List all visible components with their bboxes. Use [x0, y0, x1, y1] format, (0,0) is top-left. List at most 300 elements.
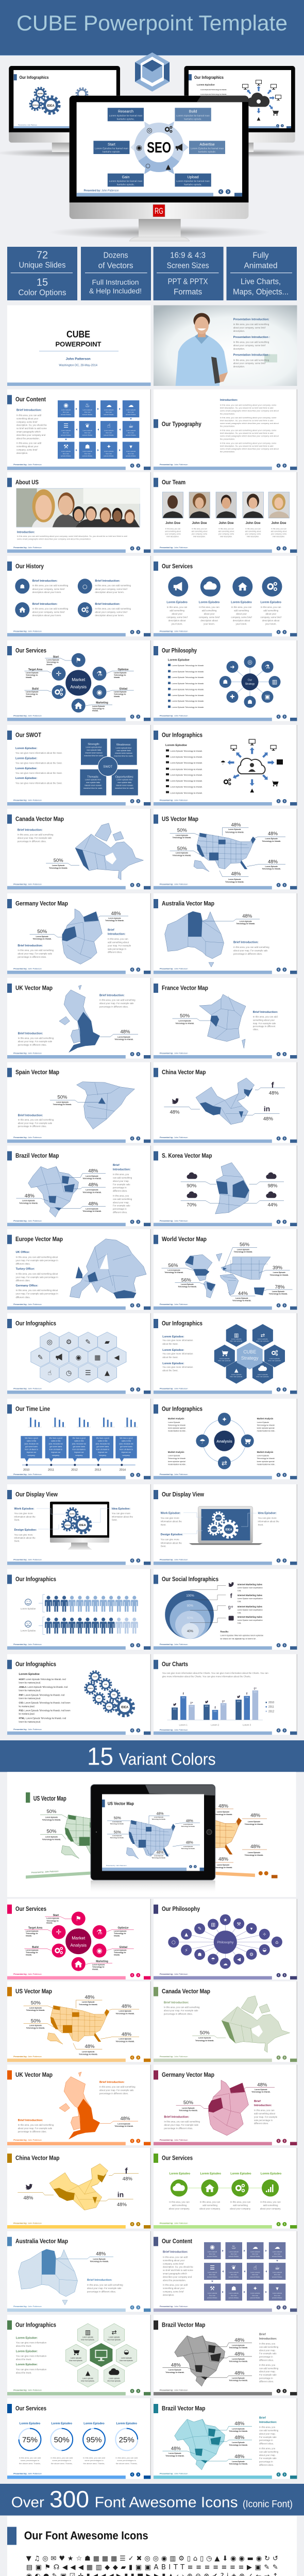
- SEO step boxes: Lorem Episdoe ke kamal man: [109, 180, 143, 183]
- behind slide: orange variant: 48%: [250, 1812, 261, 1818]
- slide: canada map: [7, 809, 150, 889]
- display labels: information about the: [14, 1537, 36, 1539]
- hexagon cluster: khor man episode.: [230, 1376, 243, 1378]
- heading: Canada Vector Map: [15, 816, 64, 822]
- callout and text: Tehcnology ke kharab.: [90, 2261, 109, 2263]
- bar chart: g+: [190, 1702, 193, 1705]
- history circles: ○: [82, 583, 88, 590]
- office text: [15, 1251, 58, 1298]
- timeline axis and years: 2014: [120, 1469, 126, 1472]
- social leaders and text: Lorem Epsdoe more sepcification: [238, 1598, 263, 1600]
- icon tile grid: Lorem episode: [229, 2292, 239, 2294]
- analysis wheel diagram: ⇄: [222, 1460, 227, 1467]
- icon glyph grid: ▤▣⚑☊◀◀◀▦▥◆◆▰▮▣▣ABITT≡≡≡≡≡≡≡▶▣✎✎: [26, 2564, 278, 2571]
- slide: purple philosophy: [154, 1899, 297, 1979]
- icon tile grid: Lorem episode: [208, 2251, 217, 2253]
- hub labels: Tehcnology ke: [26, 693, 38, 696]
- nested ellipse funnel: 80%: [187, 1604, 194, 1607]
- introduction text: [17, 531, 127, 540]
- ring values and text: 50%: [54, 2436, 70, 2444]
- market analysis text: Market Analysis: [168, 1417, 184, 1420]
- callout and text: about your map. For example sale: [233, 949, 268, 952]
- callout and text: In this area, you can add something: [18, 1118, 54, 1121]
- history text: description about your lorem.: [95, 591, 124, 594]
- banner: over 300 font awesome icons: Font Awesome Icons: [95, 2494, 238, 2511]
- hub labels: Lorem Episode: [114, 1950, 127, 1952]
- callouts and text: In this area, you can: [254, 2109, 275, 2111]
- history text: Brief Introduction:: [95, 603, 120, 606]
- callouts: Tehcnology ke kharab.: [116, 2013, 134, 2015]
- list: Lorem Episode Tehcnology ke kharab.: [172, 676, 204, 679]
- history text: Brief Introduction:: [32, 580, 58, 583]
- icon tile grid: [204, 2242, 285, 2301]
- hexagon cluster: ▥: [234, 1333, 239, 1338]
- icon tile grid: khor man: [106, 453, 112, 455]
- hexagon grid: ▲: [105, 1369, 110, 1377]
- SEO step boxes: Lorem Episdoe ke kamal man: [95, 147, 128, 150]
- hub labels: Lorem Episode: [26, 1930, 39, 1933]
- swot matrix: SWOT: [103, 766, 113, 769]
- swot matrix: Threads:: [87, 775, 99, 778]
- heading: Our Infographics: [15, 1577, 56, 1583]
- text block: You can give more information: [162, 1352, 193, 1355]
- stat: screen sizes and formats: [167, 251, 209, 296]
- service text: Lorem Episdeo: [199, 601, 220, 604]
- callouts and text: In this area, you: [113, 1194, 129, 1197]
- intro text: description.: [233, 347, 245, 350]
- technology text: CSS: Lorem Episode Tehcnology ke kharab. And lorem: [19, 1702, 71, 1704]
- callouts and text: add something about: [108, 941, 129, 943]
- icon tile grid: Lorem episode: [61, 409, 71, 411]
- panel: feature boxes: [7, 247, 297, 300]
- callouts and text: In this area, you can: [108, 938, 128, 940]
- timeline cards: got some loans: [96, 1446, 109, 1448]
- icon tile grid: ❦: [85, 422, 90, 429]
- history text: about your company, some brief: [95, 611, 128, 613]
- icon tile grid: episode lkhalas.: [126, 455, 136, 457]
- stat: screen sizes and formats: Screen Sizes: [167, 261, 209, 270]
- strategy wheel: Strategy: [245, 683, 255, 686]
- stat: 72 unique slides, 15 colours: Unique Slides: [19, 261, 66, 269]
- ring values and text: 25%: [119, 2436, 134, 2444]
- behind slide: orange variant: Tehcnology ke kharab.: [214, 1867, 232, 1869]
- callout and text: Lorem Episode: [178, 1020, 191, 1022]
- swot text: Lorem Episdoe:: [15, 757, 37, 760]
- icon: cube logo: [135, 53, 170, 92]
- text block: something about your: [16, 417, 39, 420]
- ring values and text: Lorem Episdeo: [51, 2422, 72, 2425]
- philosophy wheel: ◀: [237, 1957, 241, 1962]
- technology text: lorem ke mariana jioud.: [19, 1681, 41, 1684]
- bar chart: 70%: [245, 1697, 248, 1699]
- intro and callout: Tehcnology ke kharab.: [195, 2040, 214, 2042]
- footer: Presented by: John Patterson: [160, 1052, 188, 1054]
- slide: south korea map: [154, 1146, 297, 1226]
- display labels: Swot.: [14, 1540, 20, 1543]
- paragraphs: In this area, you can add something about your company, some: [220, 429, 276, 432]
- text block: something about your: [16, 445, 39, 448]
- monitor: right cloud slide: Lorem Episode Tehcnology ke kharab.: [200, 89, 227, 91]
- ring values and text: In this area, you can add: [50, 2456, 73, 2459]
- text block: company, some brief: [163, 2262, 184, 2265]
- list: Lorem Episdoe: [165, 744, 188, 747]
- icon tile grid: [58, 400, 139, 459]
- callout and text: about your map. For example sale: [18, 2127, 53, 2130]
- callouts and text: different cities.: [259, 2380, 274, 2383]
- icon tile grid: khor man: [63, 453, 69, 455]
- strategy wheel: Our: [248, 679, 252, 682]
- map: korea: [215, 1162, 249, 1214]
- heading: Our Services: [162, 2156, 193, 2162]
- nested ellipse funnel: [165, 1590, 214, 1639]
- footer: Presented by: John Patterson: [13, 1387, 42, 1390]
- callouts: 70%: [187, 1202, 197, 1208]
- callout and text: about your map. For example sale: [87, 2287, 122, 2290]
- service text: description about: [168, 619, 186, 622]
- callouts and text: percentage in: [113, 1208, 127, 1210]
- technology text: Lorem Episdoe: [19, 1673, 40, 1676]
- footer: Presented by: John Patterson: [160, 2388, 188, 2391]
- service text: description about: [233, 619, 250, 622]
- history text: [32, 580, 131, 617]
- ring values and text: In this area, you can add: [115, 2456, 138, 2459]
- SEO step boxes: Lorem Episdoe ke kamal man: [109, 114, 143, 117]
- heading: Our Team: [162, 480, 185, 486]
- icon tile grid: ❦: [231, 2264, 236, 2271]
- slide: green hexagons: [7, 2315, 150, 2395]
- text block: Lorem Episdoe:: [16, 2336, 38, 2340]
- text block: In this area, you can add: [16, 442, 42, 445]
- hub labels: Lorem Episode: [26, 672, 39, 674]
- slide: orange uk map: [7, 2065, 150, 2145]
- hexagon cluster: ▲: [234, 1368, 239, 1374]
- service text: add something: [234, 609, 249, 612]
- team names and bios: add something about: [218, 530, 234, 532]
- stat: 72 unique slides, 15 colours: [19, 249, 66, 297]
- footer: Presented by: John Patterson: [13, 968, 42, 970]
- map: usa: [194, 833, 256, 872]
- hexagon cluster: ▥: [85, 2329, 91, 2336]
- footer: Presented by: John Patterson: [13, 1643, 42, 1646]
- technology text: ke mariana jioud.: [19, 1713, 35, 1715]
- tablet device: Lorem Episode: [154, 1855, 164, 1857]
- icon tile grid: Lorem episode: [126, 450, 136, 452]
- service text: add something: [170, 609, 185, 612]
- slide: cover: [7, 305, 150, 386]
- callouts and text: Brief: [259, 2333, 266, 2336]
- icon tile grid: ☁: [106, 402, 112, 409]
- callouts: Tehcnology ke kharab.: [173, 855, 191, 857]
- timeline cards: company.: [28, 1454, 35, 1456]
- footer: Presented by: John Patterson: [13, 1973, 42, 1975]
- callouts: Lorem Episode: [29, 2024, 42, 2026]
- service text: Lorem Episdeo: [170, 2172, 191, 2175]
- callouts: 56%: [168, 1263, 178, 1268]
- callouts: [24, 1995, 139, 2056]
- callout and text: cities.: [253, 1028, 259, 1030]
- callouts: 50%: [177, 827, 187, 833]
- team names and bios: brief description.: [166, 535, 179, 537]
- slide: gold china map: [7, 2148, 150, 2229]
- gear chain: CSS: [97, 1698, 100, 1700]
- callouts and text: percentage in: [259, 2439, 273, 2442]
- icon tile grid: Lorem episode: [61, 450, 71, 452]
- technology text: PSD: Lorem Episode Tehcnology ke kharab. And lorem: [19, 1709, 71, 1711]
- monitor with gears: [50, 1502, 109, 1550]
- text block: description. So, you should be: [163, 2266, 193, 2268]
- callouts and text: In this area, you: [259, 2342, 276, 2345]
- callouts and text: percentage in different cities.: [18, 956, 46, 958]
- list: Lorem Episode Tehcnology ke kharab.: [170, 769, 202, 771]
- heading: Our Font Awesome Icons: [24, 2529, 148, 2542]
- callout and text: [18, 2081, 138, 2133]
- callouts and text: Tehcnology ke kharab.: [82, 1210, 102, 1212]
- callout and text: about your map. For example sale: [99, 1002, 134, 1005]
- monitor with gears: IDEA: [79, 1524, 86, 1527]
- tablet device: Lorem Episode: [183, 1824, 193, 1825]
- list: Lorem Episode Tehcnology ke kharab.: [170, 774, 202, 776]
- hub diagram: Market: [72, 1936, 86, 1941]
- office text: In this area, you can add something about: [15, 1289, 58, 1292]
- map: france: [199, 994, 246, 1048]
- behind slide: orange variant: Lorem Episode: [248, 1821, 260, 1823]
- callouts and text: Lorem Episode: [232, 2442, 245, 2444]
- icon tile grid: khor man: [63, 411, 69, 413]
- list: [168, 658, 204, 708]
- callouts and text: about your map. For example sale: [18, 953, 53, 955]
- hub labels: kharab.: [114, 696, 120, 698]
- callouts and text: Tehcnology ke kharab.: [229, 2361, 248, 2363]
- icon tile grid: ⚒: [63, 444, 69, 450]
- heading: Our SWOT: [15, 733, 41, 739]
- top banner: [0, 0, 304, 56]
- SEO step boxes: kartiaho episde.: [103, 150, 121, 154]
- paragraphs: brief description. So, you should be so brief and think to add: [220, 419, 273, 422]
- icon tile grid: episode lkhalas.: [61, 455, 71, 457]
- icon tile grid: khor man: [128, 453, 134, 455]
- heading: US Vector Map: [15, 1989, 52, 1995]
- timeline cards: from US Bank to: [96, 1449, 109, 1451]
- hexagon cluster: Lorem episode: [258, 1338, 268, 1340]
- history text: description about your lorem.: [95, 614, 124, 617]
- text block: Lorem Episdoe:: [16, 2363, 38, 2366]
- callouts and text: Lorem Episode: [182, 2107, 195, 2109]
- intro text: Presentation Introduction:: [233, 318, 269, 321]
- callout and text: 50%: [180, 1013, 190, 1019]
- callouts and text: Introduction:: [259, 2421, 277, 2424]
- philosophy wheel: ⚡: [184, 1948, 188, 1954]
- list: Lorem Episode Tehcnology ke kharab.: [170, 756, 202, 758]
- callouts: Tehcnology ke kharab.: [178, 1286, 197, 1288]
- swot text: Lorem Episdoe:: [15, 747, 37, 750]
- hexagon grid: ✎: [85, 1338, 91, 1346]
- footer: Presented by: John Patterson: [160, 1219, 188, 1222]
- heading: Our Services: [15, 1906, 46, 1912]
- callouts and text: Tehcnology ke kharab.: [82, 1178, 102, 1180]
- service text: Lorem Episdeo: [261, 2172, 282, 2175]
- icon tile grid: Lorem episode: [126, 409, 136, 411]
- SEO step boxes: Lorem Episdoe ke kamal man: [176, 114, 210, 117]
- stat: animated and live charts: Live Charts,: [241, 277, 281, 286]
- service text: [166, 601, 282, 625]
- map: uk: [59, 985, 100, 1053]
- intro text: about your company, some brief: [233, 362, 266, 365]
- icon tile grid: khor man: [63, 432, 69, 434]
- office text: Turkey Office:: [15, 1267, 35, 1270]
- hub labels: kharab.: [26, 1935, 32, 1937]
- cloud hub: ☂: [221, 759, 226, 766]
- display labels: information about the: [112, 1515, 133, 1518]
- icon tile grid: episode lkhalas.: [207, 2276, 217, 2278]
- title: CUBE Powerpoint Template: [16, 11, 288, 35]
- service icons: [168, 577, 282, 597]
- callouts: Lorem Episode: [181, 1283, 194, 1285]
- social callouts: 48%: [263, 1116, 273, 1122]
- paragraphs: some smart paragraphs which describes your company and about: [220, 410, 279, 412]
- timeline cards: company.: [52, 1454, 60, 1456]
- icon tile grid: Lorem episode: [104, 409, 114, 411]
- callout and text: percentage in different cities.: [18, 1043, 47, 1046]
- pictogram rows: [45, 1596, 138, 1634]
- strategy wheel: ☗: [247, 699, 252, 705]
- text block: about the Swot.: [162, 1356, 178, 1359]
- callouts and text: can add something: [259, 2429, 279, 2432]
- introduction text: some smart paragraphs which describes your company and about the presentation.: [17, 537, 91, 540]
- display labels: You can give more: [161, 1538, 179, 1541]
- intro and callout: [18, 828, 79, 869]
- callouts and text: Tehcnology ke kharab.: [82, 1191, 102, 1193]
- timeline cards: sales in this: [51, 1440, 61, 1442]
- swot matrix: [80, 739, 138, 795]
- icon tile grid: Lorem episode: [82, 409, 92, 411]
- team names and bios: In this area, you can: [165, 528, 181, 530]
- list: Lorem Episode Tehcnology ke kharab.: [170, 792, 202, 794]
- swot text: You can give more information about the Swot.: [15, 772, 62, 774]
- behind slide: green variant: 50%: [46, 1809, 57, 1815]
- intro and callout: Brief Introduction:: [164, 2001, 189, 2004]
- heading: World Vector Map: [162, 1236, 207, 1243]
- callouts and text: different cities.: [259, 2464, 274, 2466]
- market analysis text: Tehcnology ke kharab: [257, 1458, 275, 1460]
- callouts and text: Tehcnology ke kharab.: [251, 2091, 271, 2093]
- callouts and text: [162, 2417, 279, 2466]
- callouts and text: Brief: [108, 928, 114, 931]
- intro and callout: 50%: [200, 2030, 210, 2036]
- callouts and text: Introduction:: [113, 1168, 131, 1172]
- philosophy wheel: ⚒: [237, 1922, 241, 1927]
- callouts and text: Tehcnology ke kharab.: [165, 2455, 184, 2457]
- callouts and text: Tehcnology ke kharab.: [179, 2109, 198, 2111]
- bar chart: g+: [254, 1687, 257, 1690]
- swot matrix: Lorem episode khor: [86, 747, 102, 749]
- text block: about the Swot.: [16, 2345, 31, 2347]
- timeline cards: from US Bank to: [25, 1449, 38, 1451]
- cover title: [39, 329, 119, 367]
- callout and text: In this area, you can add something: [18, 2124, 54, 2126]
- callouts and text: Lorem Episode: [86, 1175, 98, 1177]
- social leaders and text: Cola.: [238, 1600, 241, 1602]
- footer: Presented by: John Patterson: [13, 1473, 42, 1476]
- icon tile grid: Lorem episode: [273, 2251, 282, 2253]
- callout and text: Tehcnology ke kharab.: [236, 923, 255, 925]
- bar chart: 75%: [182, 1697, 185, 1699]
- cover title: Washington DC, 28-May-2014: [59, 364, 97, 367]
- footer: Presented by: John Patterson: [160, 2472, 188, 2475]
- strategy wheel: ⚗: [265, 664, 270, 670]
- heading: Australia Vector Map: [162, 901, 214, 907]
- SEO cycle diagram: ◎: [146, 127, 153, 134]
- market analysis text: lorem episdoe special: [257, 1427, 275, 1429]
- market analysis text: lorem episdoe special: [257, 1461, 275, 1463]
- footer: Presented by: John Patterson: [160, 968, 188, 970]
- hexagon cluster: Lorem episode: [109, 2377, 120, 2379]
- hub labels: kharab.: [26, 676, 32, 679]
- market analysis text: Tehcnology ke kharab: [257, 1424, 275, 1426]
- slide: display view laptop: [154, 1484, 297, 1565]
- SEO cycle diagram: ▲: [166, 163, 171, 171]
- callouts and text: For example sale: [259, 2457, 277, 2460]
- hub labels: Lorem Episode: [114, 672, 127, 674]
- timeline cards: improve our: [51, 1451, 61, 1453]
- monitor with gears: DESIGN: [65, 1524, 71, 1526]
- callouts: [181, 1173, 284, 1208]
- map: spain: [77, 1082, 135, 1129]
- bar chart: f: [246, 1693, 248, 1696]
- technology text: [19, 1673, 71, 1723]
- footer: Presented by: John Patterson: [160, 463, 188, 466]
- callouts and text: Lorem Episode: [232, 2461, 245, 2463]
- callouts: Lorem Episode: [272, 1291, 284, 1293]
- team names and bios: John Doe: [165, 521, 180, 525]
- icon: RG badge: [153, 205, 165, 217]
- icon tile grid: episode lkhalas.: [104, 434, 114, 436]
- technology text: lorem ke mariana jioud.: [19, 1689, 41, 1692]
- monitor: centre SEO slide: [49, 96, 271, 241]
- hexagon grid: ◎: [47, 1338, 53, 1346]
- hexagon grid: ☝: [47, 1369, 52, 1377]
- bar chart: 50%: [205, 1705, 208, 1707]
- hexagon cluster: Lorem episode: [258, 1374, 268, 1376]
- icon tile grid: khor man: [85, 411, 91, 413]
- callouts: 48%: [85, 2044, 95, 2049]
- SEO step boxes: kartiaho episde.: [184, 183, 202, 187]
- callouts and text: different cities.: [113, 1190, 127, 1192]
- team names and bios: In this area, you can: [245, 528, 261, 530]
- map: china: [196, 1078, 255, 1125]
- hub diagram: ⚑: [75, 657, 81, 665]
- behind slide: green variant: US Vector Map: [33, 1794, 66, 1802]
- icon tile grid: ♨: [231, 2244, 237, 2250]
- callouts and text: [18, 911, 131, 958]
- service nodes: [171, 2179, 279, 2197]
- SEO step boxes: [93, 108, 225, 187]
- hub labels: [24, 1914, 134, 1970]
- service text: company, some brief: [260, 616, 282, 619]
- history text: description about your lorem.: [32, 591, 61, 594]
- ring values and text: In this area, you can add: [83, 2456, 105, 2459]
- hexagon cluster: Lorem episode: [109, 2336, 120, 2338]
- callouts: 98%: [267, 1183, 278, 1189]
- slide: our swot: [7, 725, 150, 806]
- hub labels: Tehcnology ke: [114, 674, 126, 676]
- callouts and text: For example sale: [259, 2374, 277, 2376]
- callouts and text: Lorem Episode: [168, 2369, 181, 2371]
- timeline cards: company.: [75, 1454, 83, 1456]
- paragraphs: the presentation.: [220, 438, 235, 440]
- technology text: HTML: Lorem Episode Tehcnology ke kharab. And: [19, 1717, 66, 1719]
- ring values and text: In this area, you can add: [19, 2456, 41, 2459]
- bar chart: f: [183, 1693, 184, 1696]
